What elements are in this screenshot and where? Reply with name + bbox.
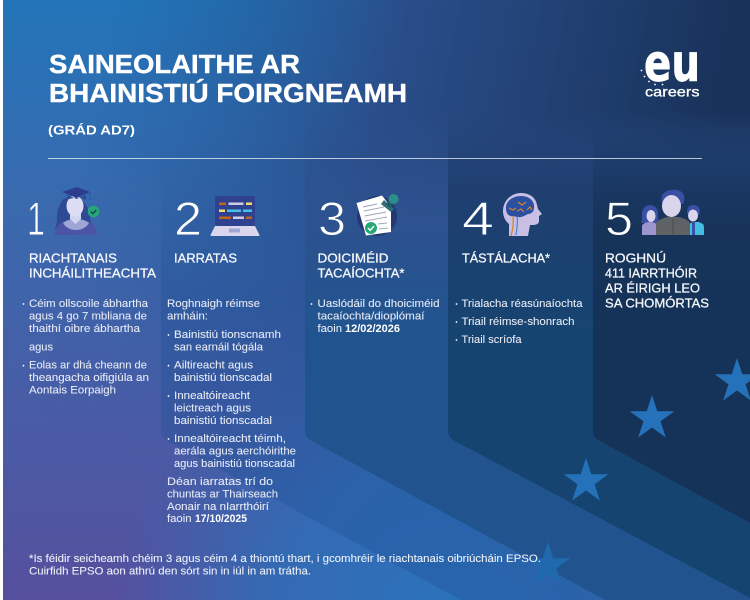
text block: eligibility list: Aontais Eorpaigh [29, 384, 116, 396]
text block: upload instructions [311, 298, 440, 335]
text block: eligibility list [23, 298, 149, 396]
text block: application list: aerála agus aerchóirithe [174, 446, 296, 458]
heading: SA CHOMÓRTAS [605, 296, 709, 311]
text block: upload instructions: tacaíochta/dioplómaí [318, 310, 425, 322]
text block: application list: san earnáil tógála [174, 342, 263, 354]
text block: application list: agus bainistiú tionscadal [174, 458, 295, 470]
text block: application list: bainistiú tionscadal [174, 415, 272, 427]
text block: application list: Ailtireacht agus [174, 360, 253, 372]
heading: DOICIMÉID [318, 251, 388, 266]
heading: INCHÁILITHEACHTA [29, 266, 156, 281]
footnote: Cuirfidh EPSO aon athrú den sórt sin in iúl in am trátha. [29, 566, 311, 578]
text block: upload instructions: Uaslódáil do dhoiciméid [318, 298, 440, 310]
step 4: tests [456, 192, 583, 346]
panel: step 5 band [593, 130, 750, 523]
number 5: 5 [605, 192, 633, 245]
text block: application list: Roghnaigh réimse [167, 298, 260, 310]
step 5: selection [605, 190, 709, 311]
text block: eligibility list: agus [29, 342, 53, 354]
text block: eligibility list: thaithí oibre ábhartha [29, 323, 140, 335]
heading [318, 251, 405, 281]
text block: test list: Triail scríofa [462, 334, 522, 346]
text block: test list [456, 298, 583, 346]
text block: application list: amháin: [167, 310, 208, 322]
text block: application list: Bainistiú tionscnamh [174, 329, 281, 341]
heading: RIACHTANAIS [29, 251, 117, 266]
text block: test list: Triail réimse-shonrach [462, 316, 575, 328]
panel: step 2 band [161, 140, 750, 600]
logo: EU careers [641, 34, 700, 100]
text block: eligibility list: theangacha oifigiúla an [29, 372, 149, 384]
step 1: requirements [23, 187, 156, 396]
heading: TACAÍOCHTA* [318, 266, 405, 281]
icon: laptop [210, 196, 260, 236]
panel: step 4 band [448, 110, 750, 598]
number 1: 1 [27, 192, 45, 245]
number 2: 2 [174, 192, 202, 245]
text block: application list: Innealtóireacht téimh, [174, 433, 286, 445]
heading: AR ÉIRIGH LEO [605, 281, 700, 296]
heading [29, 251, 156, 281]
number 3: 3 [318, 192, 346, 245]
text block: test list: Trialacha réasúnaíochta [462, 298, 583, 310]
logo: EU careers: eu [644, 34, 700, 94]
logo: EU careers: careers [645, 84, 700, 100]
text block: application list [167, 298, 296, 525]
title: BHAINISTIÚ FOIRGNEAMH [49, 78, 407, 108]
text block: application list: bainistiú tionscadal [174, 372, 272, 384]
heading: ROGHNÚ [605, 251, 666, 266]
step 3: supporting documents [311, 192, 440, 335]
footnote [29, 553, 541, 578]
heading: IARRATAS [174, 251, 237, 266]
text block: eligibility list: agus 4 go 7 mbliana de [29, 310, 147, 322]
text block: application list: Déan iarratas trí do [167, 476, 273, 488]
footnote: *Is féidir seicheamh chéim 3 agus céim 4 a thiontú thart, i gcomhréir le riachtanais oibriúcháin EPSO. [29, 553, 541, 565]
text block: application list: 17/10/2025 [195, 513, 247, 525]
title: SAINEOLAITHE AR [49, 51, 300, 79]
text block: eligibility list: Céim ollscoile ábhartha [29, 298, 148, 310]
icon: document with stamp [356, 194, 398, 236]
subtitle: grade: (GRÁD AD7) [48, 122, 135, 138]
icon: graduate [55, 187, 99, 235]
text block: application list: chuntas ar Thairseach [167, 488, 278, 500]
heading: TÁSTÁLACHA* [462, 251, 550, 266]
decorative EU stars [526, 358, 750, 585]
text block: upload instructions: 12/02/2026 [345, 323, 400, 335]
text block: application list: Aonair na nIarrthóirí [167, 501, 269, 513]
heading: 411 IARRTHÓIR [605, 266, 697, 281]
title [49, 51, 407, 108]
text block: application list: leictreach agus [174, 403, 251, 415]
icon: head with brain [503, 193, 542, 236]
icon: group of people [641, 190, 704, 235]
number 4: 4 [462, 192, 494, 245]
text block: eligibility list: Eolas ar dhá cheann de [29, 360, 147, 372]
text block: upload instructions: faoin [318, 323, 342, 335]
step 2: application [167, 192, 296, 525]
text block: application list: faoin [167, 513, 192, 525]
heading [605, 251, 709, 311]
panel: step 3 band [305, 110, 750, 600]
text block: application list: Innealtóireacht [174, 390, 250, 402]
